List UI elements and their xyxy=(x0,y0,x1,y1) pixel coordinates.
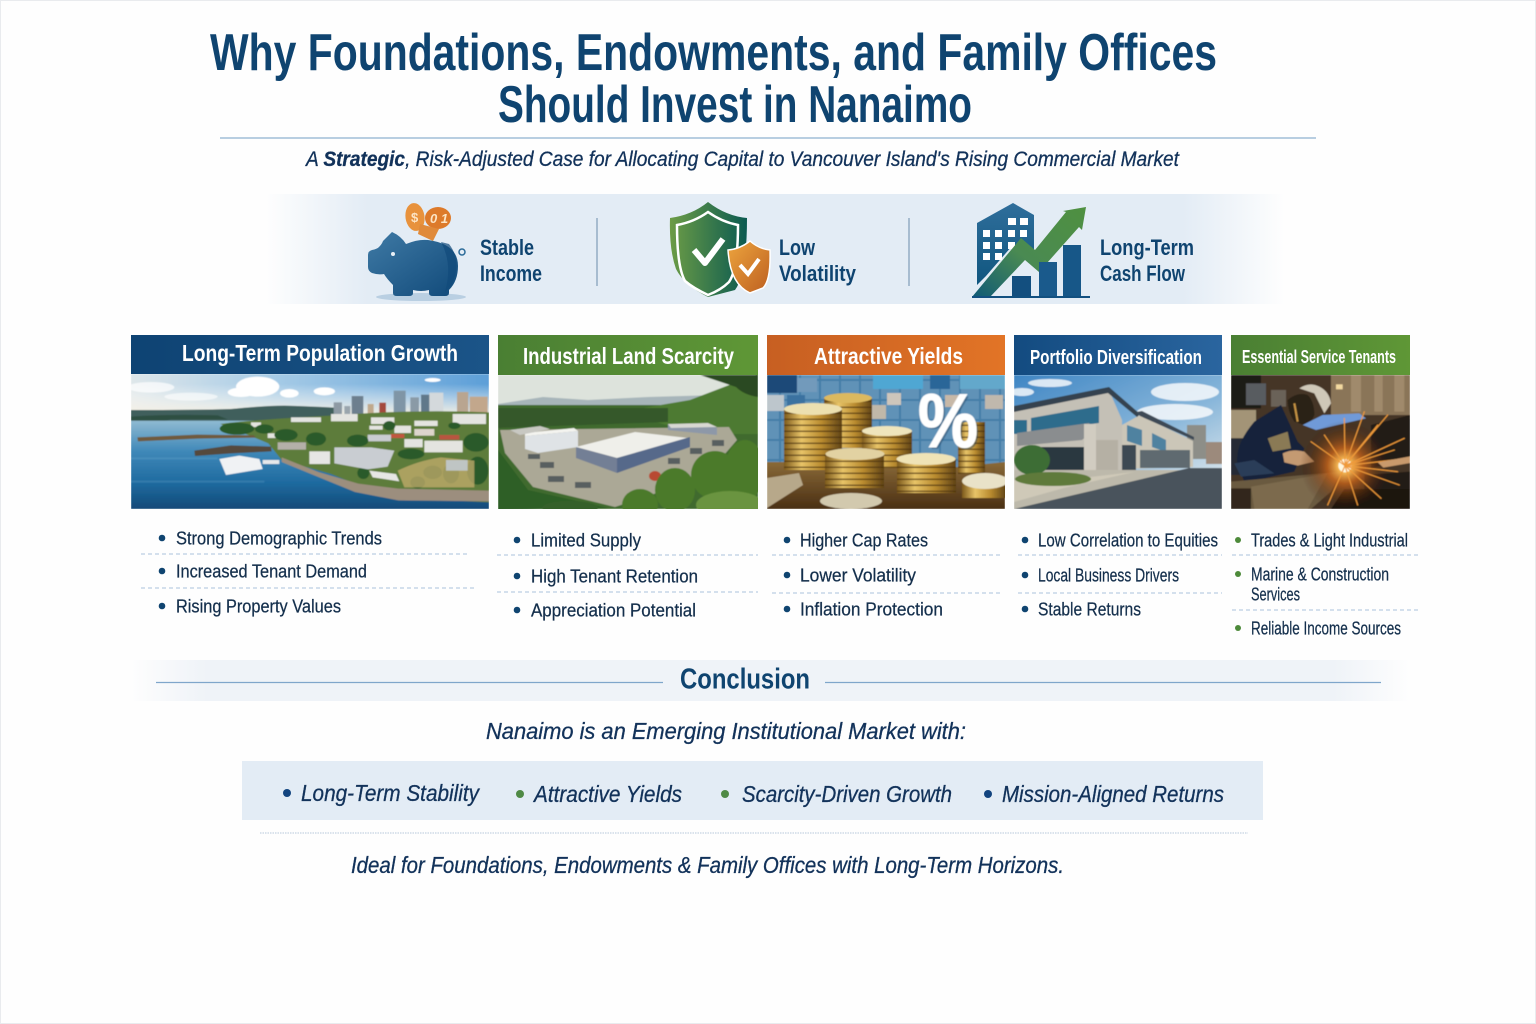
heading xyxy=(498,335,758,375)
bullet list: Essential Tenants xyxy=(1232,530,1418,638)
label: Low Volatility xyxy=(779,235,857,286)
label: Stable Income: Income xyxy=(480,261,542,286)
bullet list: Yields: Higher Cap Rates xyxy=(800,530,928,550)
title: Should Invest in Nanaimo xyxy=(498,76,972,134)
label: Low Volatility: Low xyxy=(779,235,816,260)
bullet list: Land Scarcity: High Tenant Retention xyxy=(531,566,698,586)
heading: Industrial Land Scarcity xyxy=(523,343,734,369)
panel: Essential Service Tenants xyxy=(1231,335,1410,511)
heading: Essential Service Tenants xyxy=(1242,346,1396,367)
panel: benefits band xyxy=(265,194,1285,304)
panel: Industrial Land Scarcity xyxy=(498,335,765,521)
bullet list: Land Scarcity: Appreciation Potential xyxy=(531,600,696,620)
label: Long-Term Cash Flow: Cash Flow xyxy=(1100,261,1186,286)
bullet list: Population Growth xyxy=(141,528,477,616)
panel: Long-Term Population Growth xyxy=(128,335,489,509)
bullet list: Diversification: Local Business Drivers xyxy=(1038,564,1179,586)
bullet list: Land Scarcity: Limited Supply xyxy=(531,530,642,550)
panel: conclusion points xyxy=(242,761,1263,820)
bullet list: Population Growth: Increased Tenant Demand xyxy=(176,560,367,582)
bullet list: Population Growth: Rising Property Values xyxy=(176,596,341,616)
coin stacks xyxy=(784,393,1008,509)
text: closing statement: Ideal for Foundations, Endowments & Family Offices with Long-Term Horizons. xyxy=(351,852,1064,878)
heading xyxy=(131,335,489,374)
icon: shields with check marks xyxy=(670,202,770,297)
icon: building and growth chart xyxy=(972,203,1090,298)
photo: gold coins and percent sign: % xyxy=(918,379,978,464)
heading: Attractive Yields xyxy=(814,343,963,369)
photo: waterfront city xyxy=(128,374,489,509)
panel: Portfolio Diversification xyxy=(1010,335,1222,509)
photo: commercial building xyxy=(1010,375,1222,509)
bullet list: Essential Tenants: Reliable Income Sources xyxy=(1251,618,1401,638)
label: Stable Income xyxy=(480,235,542,286)
percent sign: % xyxy=(920,381,980,466)
bullet list: Diversification xyxy=(1018,530,1222,620)
title: Why Foundations, Endowments, and Family Offices xyxy=(210,24,1217,82)
bullet list: Land Scarcity xyxy=(497,530,758,620)
photo: industrial park xyxy=(498,375,758,509)
bullet list: Diversification: Low Correlation to Equities xyxy=(1038,530,1218,550)
bullet list: Essential Tenants: Services xyxy=(1251,584,1300,604)
bullet list: Essential Tenants: Trades & Light Industrial xyxy=(1251,530,1408,550)
heading xyxy=(767,335,1005,375)
label: Long-Term Cash Flow xyxy=(1100,235,1194,286)
panel: conclusion points: Long-Term Stability xyxy=(301,780,480,806)
heading xyxy=(1231,335,1410,375)
label: Low Volatility: Volatility xyxy=(779,261,857,286)
heading xyxy=(1014,335,1222,375)
text: emerging market lead: Nanaimo is an Emerging Institutional Market with: xyxy=(486,718,966,744)
heading: conclusion band xyxy=(130,660,1410,701)
icon: piggy bank with coins xyxy=(368,202,466,301)
icon: piggy bank with coins: $ xyxy=(411,210,419,225)
title xyxy=(210,24,1217,134)
panel: conclusion points: Attractive Yields xyxy=(532,781,682,807)
subtitle: A Strategic, Risk-Adjusted Case for Allocating Capital to Vancouver Island's Rising Commercial Market xyxy=(304,148,1180,171)
bullet list: Population Growth: Strong Demographic Trends xyxy=(176,528,382,548)
city blocks xyxy=(251,414,486,452)
panel: conclusion points: Scarcity-Driven Growth xyxy=(742,781,952,807)
rocky white terraces xyxy=(309,447,468,481)
panel: Attractive Yields xyxy=(767,335,1008,509)
label: Stable Income: Stable xyxy=(480,235,534,260)
photo: welder with sparks xyxy=(1231,375,1410,511)
bullet list: Diversification: Stable Returns xyxy=(1038,598,1141,620)
bullet list: Yields xyxy=(772,530,1002,620)
panel: conclusion points: Mission-Aligned Returns xyxy=(1002,781,1224,807)
bullet list: Yields: Inflation Protection xyxy=(800,598,943,620)
bullet list: Essential Tenants: Marine & Construction xyxy=(1251,564,1389,584)
icon: piggy bank with coins: 0 1 xyxy=(430,211,448,226)
heading: Long-Term Population Growth xyxy=(182,340,458,366)
heading: Portfolio Diversification xyxy=(1030,347,1202,369)
photo: gold coins and percent sign xyxy=(767,375,1008,509)
heading: conclusion band: Conclusion xyxy=(680,664,810,696)
label: Long-Term Cash Flow: Long-Term xyxy=(1100,235,1194,260)
bullet list: Yields: Lower Volatility xyxy=(800,564,917,586)
